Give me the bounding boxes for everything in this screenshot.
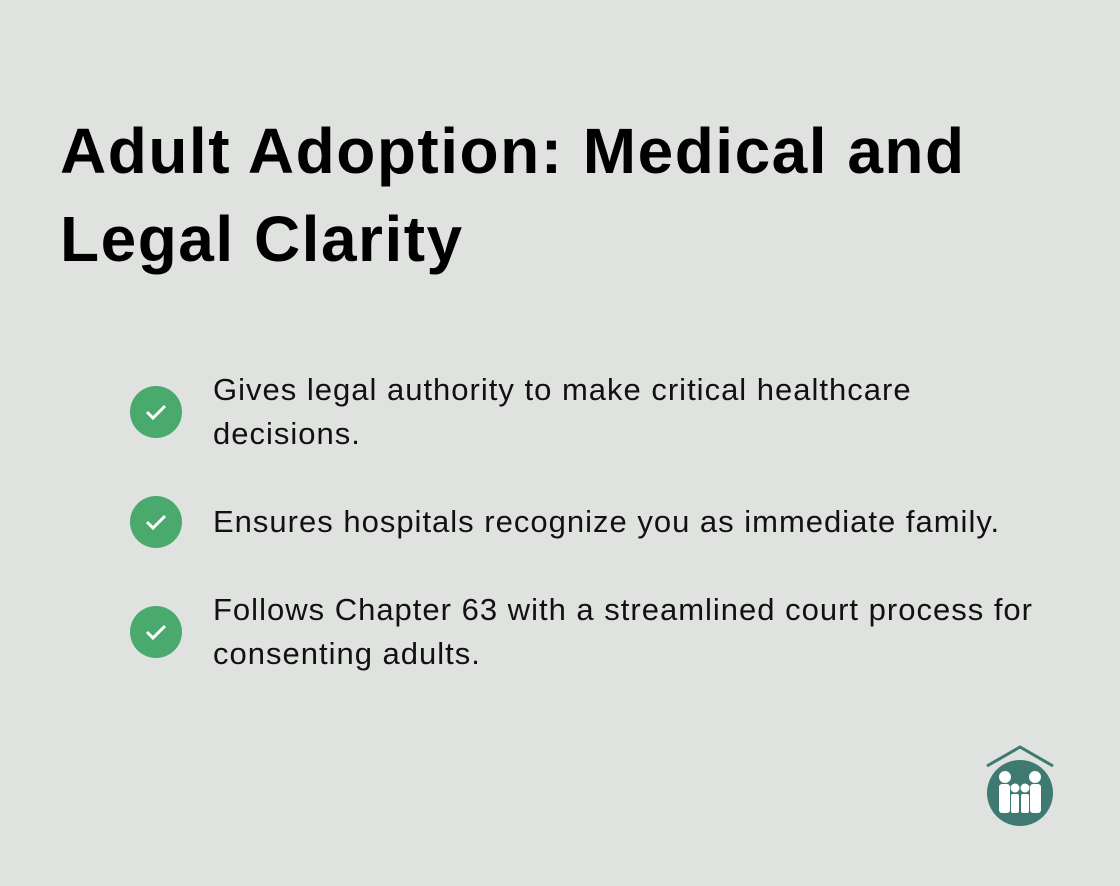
- text 1: [213, 372, 912, 451]
- title: Legal Clarity: [60, 203, 464, 275]
- item 3: [130, 592, 1033, 671]
- title: Adult Adoption: Medical and: [60, 115, 966, 187]
- item 2: [130, 496, 1000, 548]
- text 1: decisions.: [213, 416, 361, 451]
- text 1: Gives legal authority to make critical healthcare: [213, 372, 912, 407]
- icon: check: [130, 386, 182, 438]
- text 3: consenting adults.: [213, 636, 481, 671]
- text 3: [213, 592, 1033, 671]
- text 3: Follows Chapter 63 with a streamlined court process for: [213, 592, 1033, 627]
- logo: [986, 745, 1054, 826]
- text 2: Ensures hospitals recognize you as immediate family.: [213, 504, 1000, 539]
- icon: check: [130, 496, 182, 548]
- title: [60, 115, 966, 275]
- icon: check: [130, 606, 182, 658]
- item 1: [130, 372, 912, 451]
